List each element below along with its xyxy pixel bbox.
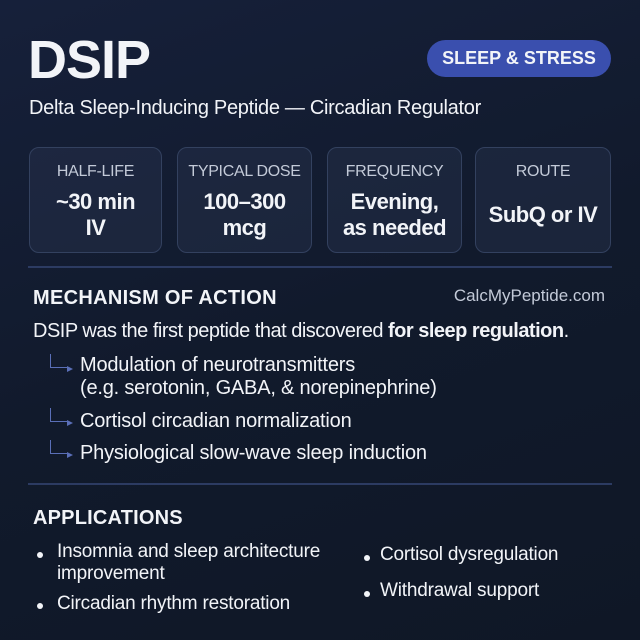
applications list: Insomnia and sleep architecture xyxy=(57,541,320,562)
mechanism list: Modulation of neurotransmitters xyxy=(80,354,355,376)
title: DSIP xyxy=(28,30,150,90)
mechanism list xyxy=(50,354,437,464)
card: dose xyxy=(177,147,312,253)
mechanism list: Physiological slow-wave sleep induction xyxy=(80,442,427,464)
applications list: improvement xyxy=(57,563,165,584)
mechanism heading: MECHANISM OF ACTION xyxy=(33,287,277,309)
card: dose: TYPICAL DOSE xyxy=(188,163,301,180)
website: CalcMyPeptide.com xyxy=(454,286,605,305)
card: dose: mcg xyxy=(223,215,266,240)
card: route: ROUTE xyxy=(516,163,570,180)
mechanism list: Cortisol circadian normalization xyxy=(80,410,352,432)
card: half-life xyxy=(29,147,162,253)
applications heading: APPLICATIONS xyxy=(33,507,183,529)
card: half-life: HALF-LIFE xyxy=(57,163,134,180)
card: half-life: ~30 min xyxy=(56,189,135,214)
applications list: Circadian rhythm restoration xyxy=(57,593,290,614)
card: frequency: FREQUENCY xyxy=(346,163,443,180)
applications list: Withdrawal support xyxy=(380,580,539,601)
card: frequency: Evening, xyxy=(351,189,438,214)
applications list xyxy=(37,541,558,614)
mechanism list: (e.g. serotonin, GABA, & norepinephrine) xyxy=(80,377,437,399)
mechanism text: DSIP was the first peptide that discovered for sleep regulation. xyxy=(33,320,569,342)
card: route xyxy=(475,147,611,253)
card: dose: 100–300 xyxy=(203,189,286,214)
badge: SLEEP & STRESS xyxy=(442,48,596,68)
subtitle: Delta Sleep-Inducing Peptide — Circadian Regulator xyxy=(29,97,481,119)
card: frequency xyxy=(327,147,462,253)
badge xyxy=(427,40,611,77)
applications list: Cortisol dysregulation xyxy=(380,544,558,565)
card: frequency: as needed xyxy=(343,215,446,240)
card: half-life: IV xyxy=(86,215,105,240)
card: route: SubQ or IV xyxy=(489,202,597,227)
